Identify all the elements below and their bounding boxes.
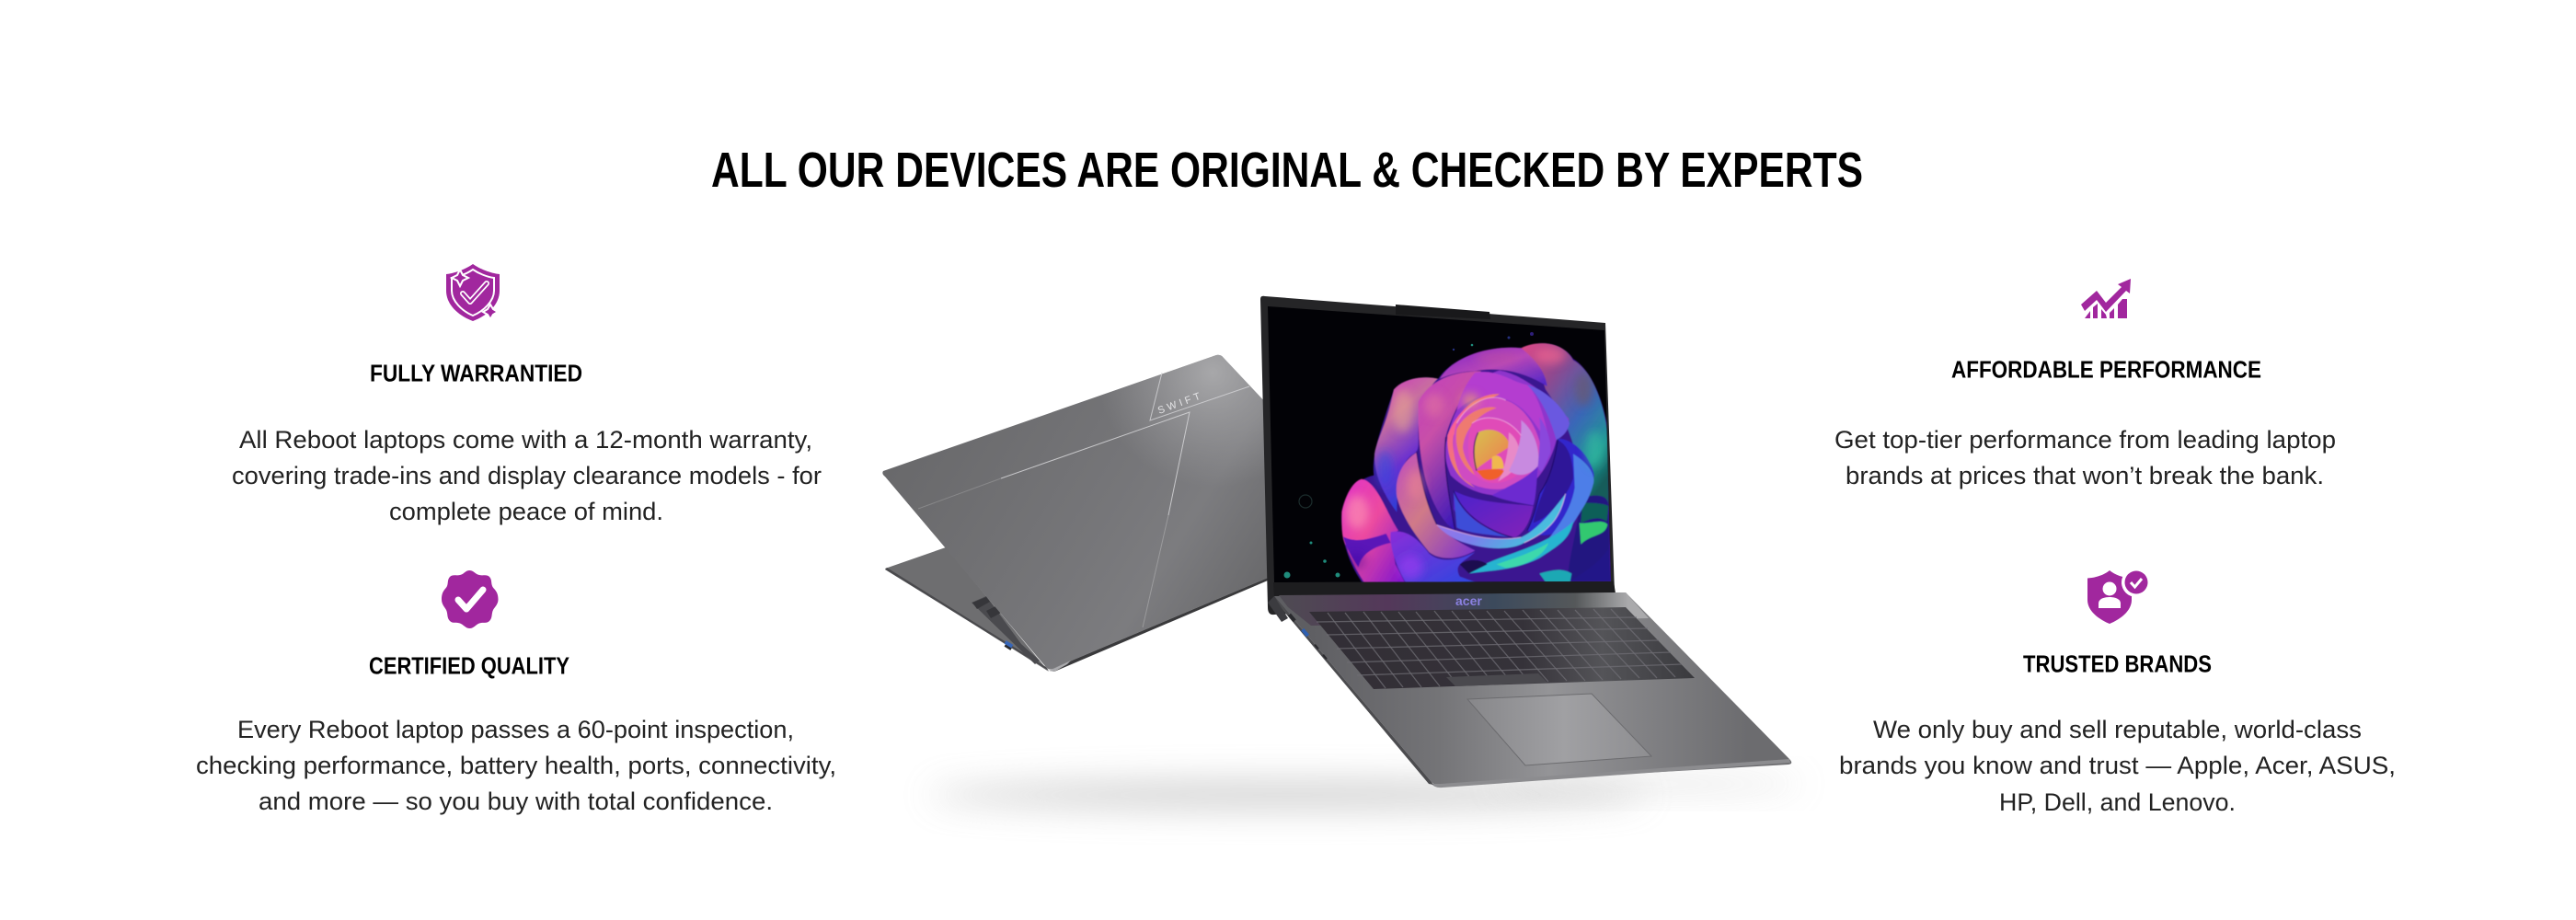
side keys and ports — [972, 596, 1040, 664]
screen droplets — [1284, 332, 1534, 578]
text block: covering trade-ins and display clearance models - for — [232, 462, 822, 489]
bottom sweep petal — [1437, 494, 1566, 548]
panel: fully warrantied — [232, 264, 822, 525]
spacebar — [1446, 673, 1547, 686]
center front petal — [1454, 490, 1534, 537]
petal shadow lines — [1417, 432, 1558, 537]
bottom left petal — [1390, 532, 1478, 583]
text block: Every Reboot laptop passes a 60-point inspection, — [237, 716, 794, 743]
right lower petal — [1569, 496, 1610, 581]
icon: shield with check — [446, 264, 500, 321]
screen — [1260, 299, 1619, 589]
rose inner layers — [1445, 371, 1569, 496]
lid line art — [918, 373, 1249, 627]
panel: affordable performance — [1834, 279, 2336, 489]
keyboard — [1309, 607, 1695, 689]
front laptop — [1260, 296, 1791, 788]
panel: certified quality — [196, 570, 836, 815]
floor shadow — [929, 778, 1803, 809]
text block: HP, Dell, and Lenovo. — [1999, 788, 2236, 816]
heading: AFFORDABLE PERFORMANCE — [1951, 355, 2261, 383]
icon: rising chart arrow — [2081, 279, 2131, 318]
top petal — [1440, 348, 1547, 386]
text block: and more — so you buy with total confidence. — [259, 788, 773, 815]
text block: All Reboot laptops come with a 12-month warranty, — [239, 426, 812, 454]
back laptop — [882, 355, 1268, 672]
petal highlight lines — [1437, 397, 1566, 543]
acer logo: acer — [1455, 593, 1482, 608]
lower left petal — [1341, 479, 1405, 583]
icon: certified badge — [442, 570, 499, 628]
rose colour washes — [1345, 347, 1604, 580]
text block: brands at prices that won’t break the bank. — [1846, 462, 2324, 489]
text block: checking performance, battery health, ports, connectivity, — [196, 752, 836, 779]
title: ALL OUR DEVICES ARE ORIGINAL & CHECKED BY EXPERTS — [711, 143, 1863, 198]
side ports — [1288, 614, 1328, 660]
text block — [232, 426, 822, 525]
rose base — [1341, 343, 1612, 586]
heading: CERTIFIED QUALITY — [369, 651, 569, 679]
panel: trusted brands — [1839, 568, 2396, 816]
lid logo: SWIFT — [1156, 390, 1205, 417]
lid — [882, 355, 1268, 670]
screen chin — [1273, 581, 1616, 598]
upper left petal — [1374, 377, 1438, 512]
text block: We only buy and sell reputable, world-class — [1873, 716, 2362, 743]
text block: brands you know and trust — Apple, Acer, ASUS, — [1839, 752, 2396, 779]
base — [885, 547, 1049, 672]
keyboard deck — [1274, 592, 1791, 785]
text block: complete peace of mind. — [389, 498, 663, 525]
text block: Get top-tier performance from leading laptop — [1834, 426, 2336, 454]
touchpad — [1467, 694, 1651, 765]
text block — [196, 716, 836, 815]
lid back edge — [1260, 296, 1615, 615]
heading: TRUSTED BRANDS — [2023, 650, 2212, 677]
infographic canvas — [197, 152, 2394, 824]
text block — [1834, 426, 2336, 489]
webcam notch — [1396, 305, 1490, 319]
right outer petal — [1521, 343, 1608, 511]
icon: shield with user and check — [2087, 568, 2151, 624]
rose — [1341, 343, 1612, 586]
front left petal — [1397, 453, 1475, 558]
laptop photo — [882, 296, 1803, 809]
text block — [1839, 716, 2396, 816]
heading: FULLY WARRANTIED — [370, 359, 582, 386]
inner left petal — [1419, 371, 1481, 531]
right cup petal — [1527, 439, 1594, 535]
